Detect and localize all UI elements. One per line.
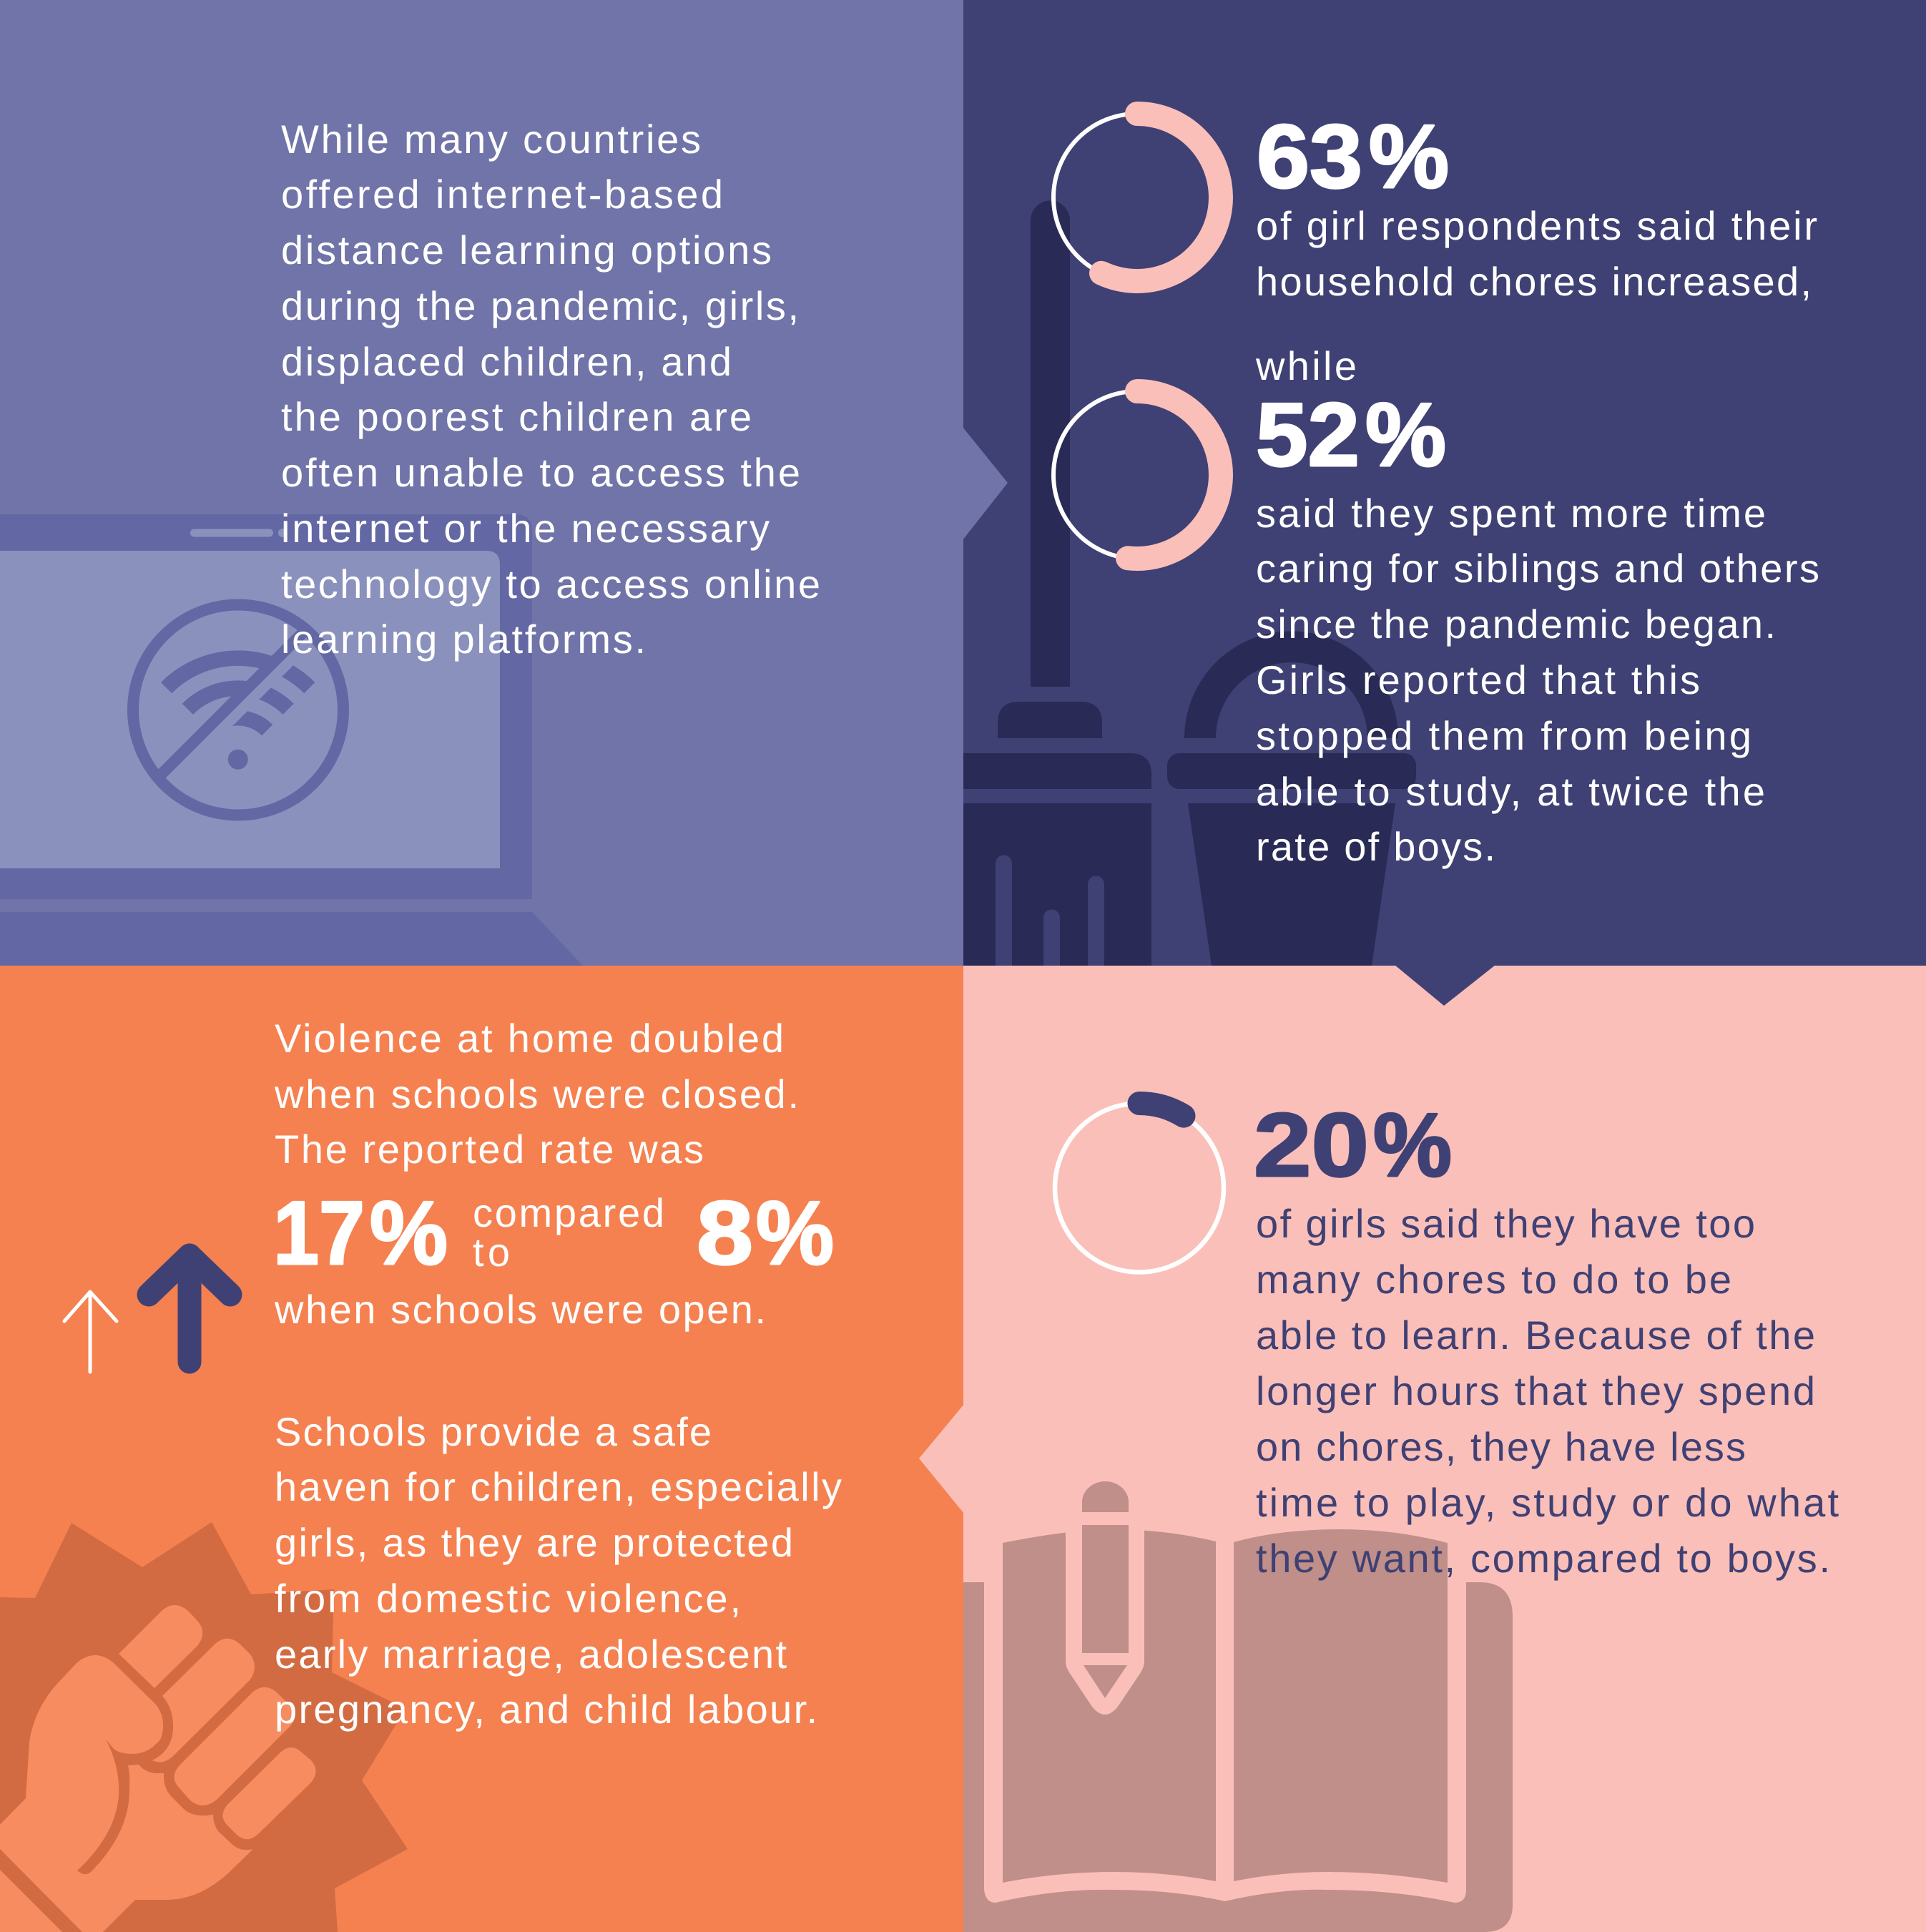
text: compared to <box>473 1190 664 1275</box>
text: caring for siblings: Girls reported that this <box>1256 657 1700 702</box>
icon: bucket <box>1167 631 1416 966</box>
icon: no wifi <box>133 605 343 815</box>
icon: fist in burst <box>0 1522 408 1932</box>
text: caring for siblings: rate of boys. <box>1256 824 1495 869</box>
icon: broom <box>963 200 1151 966</box>
text: chores increased: of girl respondents said their <box>1256 203 1817 248</box>
stat: 52% <box>1256 384 1446 485</box>
arrow: lilac pointer <box>963 427 1008 540</box>
text: too many chores: longer hours that they spend <box>1256 1368 1815 1413</box>
text: distance learning: distance learning options <box>281 227 772 273</box>
donut chart: 20% <box>1055 1103 1224 1272</box>
stat: 63%: % <box>1369 106 1449 207</box>
text: safe haven: from domestic violence, <box>275 1576 741 1621</box>
stat: 17% <box>273 1182 448 1283</box>
text: caring for siblings <box>1256 491 1819 869</box>
text: schools open: when schools were open. <box>274 1287 766 1332</box>
stat: 8%: % <box>756 1182 834 1283</box>
stat: 63% <box>1257 106 1449 207</box>
text: too many chores: many chores to do to be <box>1256 1257 1731 1302</box>
text: caring for siblings: able to study, at twice the <box>1256 769 1765 814</box>
text: chores increased <box>1255 203 1817 388</box>
stat: 20% <box>1254 1094 1452 1195</box>
arrow: navy pointer <box>1395 965 1495 1006</box>
text: violence doubled: Violence at home doubled <box>275 1016 784 1061</box>
stat: 20%: % <box>1373 1094 1452 1195</box>
text: compared to: compared <box>473 1190 664 1235</box>
text: chores increased: household chores increased, <box>1256 259 1812 304</box>
stat: 52%: 52 <box>1256 384 1360 485</box>
text: too many chores: they want, compared to boys. <box>1256 1536 1830 1581</box>
text: distance learning: during the pandemic, girls, <box>281 283 799 328</box>
stat: 52%: % <box>1365 384 1446 485</box>
text: safe haven: early marriage, adolescent <box>275 1632 787 1677</box>
text: distance learning: displaced children, and <box>281 339 732 384</box>
icon: book and pencil <box>963 1481 1513 1932</box>
icon: small white arrow <box>64 1292 117 1372</box>
panel: less time to learn <box>963 966 1926 1932</box>
stat: 63%: 63 <box>1257 106 1362 207</box>
text: caring for siblings: stopped them from being <box>1256 713 1751 758</box>
text: too many chores: of girls said they have too <box>1256 1201 1755 1246</box>
text: distance learning: the poorest children are <box>281 394 752 439</box>
text: caring for siblings: caring for siblings and others <box>1256 546 1819 591</box>
donut chart: 63% <box>1053 114 1221 281</box>
text: caring for siblings: since the pandemic began. <box>1256 602 1776 647</box>
text: violence doubled: The reported rate was <box>275 1127 704 1172</box>
panel: household chores <box>963 0 1926 966</box>
text: distance learning: technology to access online <box>281 562 820 607</box>
text: violence doubled: when schools were closed. <box>274 1072 799 1117</box>
text: safe haven <box>275 1409 842 1732</box>
panel: violence at home <box>0 966 963 1932</box>
text: safe haven: Schools provide a safe <box>275 1409 712 1454</box>
text: distance learning: often unable to access the <box>281 450 800 495</box>
stat: 8%: 8 <box>697 1182 753 1283</box>
stat: 20%: 20 <box>1254 1094 1369 1195</box>
text: too many chores: on chores, they have less <box>1256 1424 1746 1469</box>
text: too many chores <box>1256 1201 1839 1581</box>
text: safe haven: pregnancy, and child labour. <box>275 1687 817 1732</box>
stat: 17%: 17 <box>273 1182 365 1283</box>
text: violence doubled <box>274 1016 799 1172</box>
text: too many chores: time to play, study or do what <box>1256 1480 1839 1525</box>
text: distance learning: learning platforms. <box>281 617 646 662</box>
text: safe haven: haven for children, especially <box>275 1464 842 1509</box>
text: too many chores: able to learn. Because of the <box>1256 1313 1815 1358</box>
panel: internet access <box>0 0 963 966</box>
text: distance learning: internet or the necessary <box>281 506 770 551</box>
icon: large navy arrow <box>149 1255 230 1362</box>
text: caring for siblings: said they spent more time <box>1256 491 1766 536</box>
text: safe haven: girls, as they are protected <box>275 1520 793 1565</box>
text: compared to: to <box>473 1230 510 1275</box>
arrow: pink pointer <box>919 1404 964 1514</box>
icon: laptop <box>0 514 583 966</box>
text: distance learning <box>281 117 820 662</box>
stat: 17%: % <box>370 1182 448 1283</box>
stat: 8% <box>697 1182 834 1283</box>
text: distance learning: While many countries <box>281 117 701 162</box>
text: distance learning: offered internet-based <box>281 172 723 217</box>
donut chart: 52% <box>1053 391 1221 559</box>
text: chores increased: while <box>1255 343 1357 388</box>
